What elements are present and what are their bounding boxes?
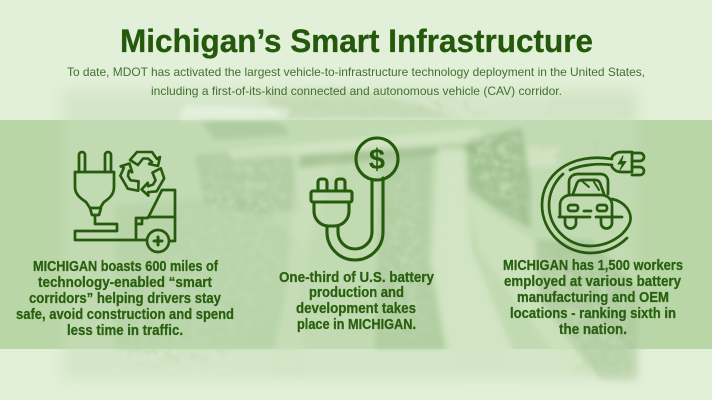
text: battery production: place in MICHIGAN.	[297, 317, 416, 333]
aerial highway photo	[62, 86, 642, 384]
text: smart corridors: safe, avoid construction and spend	[16, 307, 234, 323]
text: battery workers	[503, 258, 683, 338]
text: battery workers: the nation.	[559, 322, 627, 338]
intro text: To date, MDOT has activated the largest vehicle-to-infrastructure technology deployment in the United States,	[67, 65, 645, 79]
dollar sign: $	[369, 144, 385, 176]
title: Michigan’s Smart Infrastructure	[120, 23, 593, 59]
text: smart corridors: MICHIGAN boasts 600 miles of	[33, 259, 218, 275]
text: battery production: production and	[309, 285, 404, 301]
green band	[0, 120, 712, 349]
text: smart corridors: less time in traffic.	[67, 323, 183, 339]
text: battery workers: MICHIGAN has 1,500 workers	[503, 258, 683, 274]
text: battery workers: locations - ranking sixth in	[510, 306, 676, 322]
text: smart corridors	[16, 259, 234, 339]
icon: electric car in charging cable	[542, 152, 644, 253]
text: battery production	[279, 270, 434, 333]
text: battery workers: manufacturing and OEM	[517, 290, 669, 306]
icon: plug, recycling symbol and car	[75, 152, 175, 252]
text: battery workers: employed at various battery	[504, 274, 681, 290]
text: battery production: development takes	[296, 301, 416, 317]
icon: recycling arrows	[116, 152, 168, 198]
text: smart corridors: corridors” helping drivers stay	[29, 291, 221, 307]
text: smart corridors: technology-enabled “smart	[38, 275, 212, 291]
icon: plug with dollar cord	[311, 138, 398, 260]
intro text: including a first-of-its-kind connected and autonomous vehicle (CAV) corridor.	[151, 84, 562, 98]
text: battery production: One-third of U.S. battery	[279, 270, 434, 286]
intro text	[67, 65, 645, 98]
